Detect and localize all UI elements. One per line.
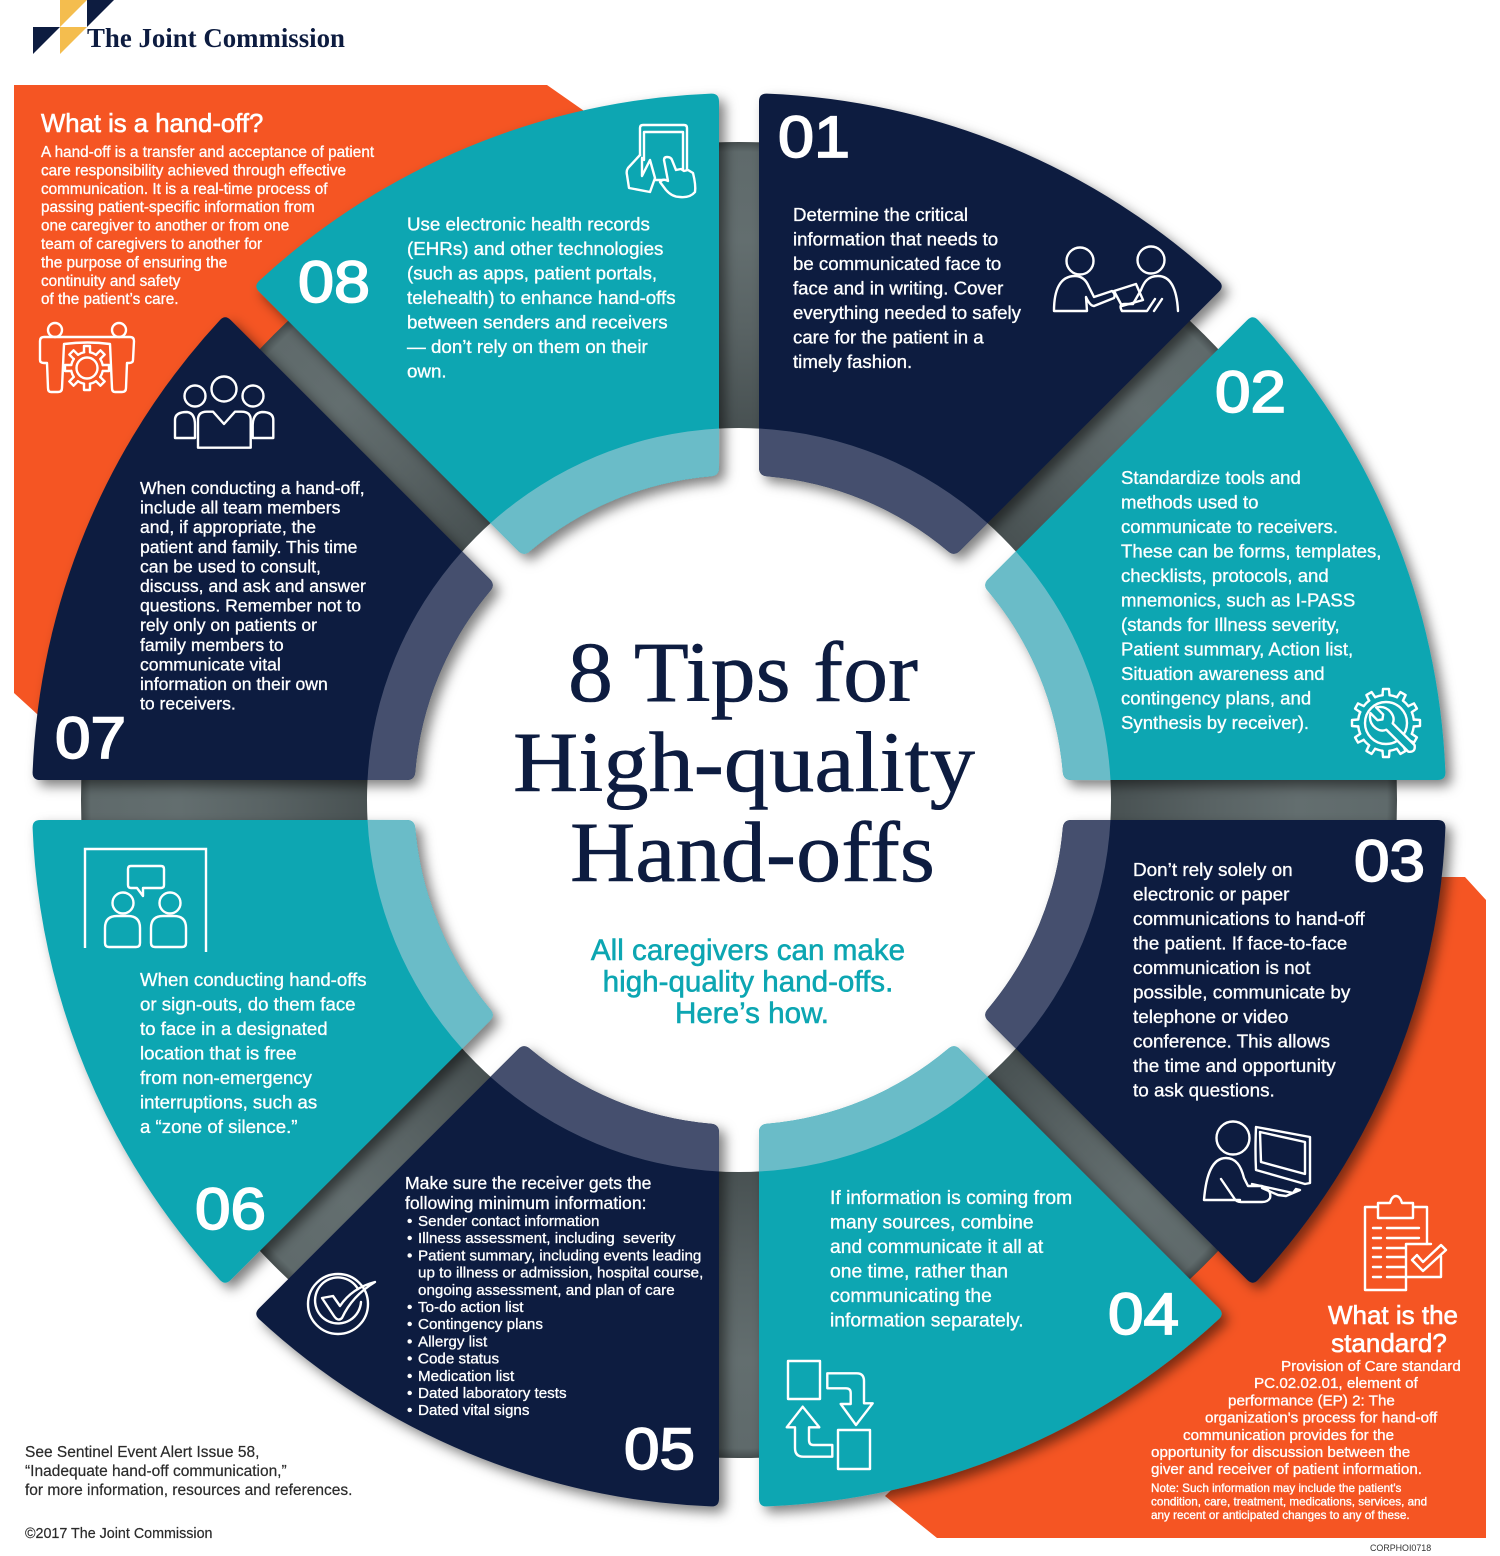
list tip 05: Illness assessment, including severity — [418, 1230, 676, 1247]
list tip 05: Sender contact information — [418, 1213, 600, 1230]
list tip 05: • — [407, 1351, 412, 1368]
text tip 02: methods used to — [1121, 492, 1258, 512]
what is the standard heading: What is the — [1328, 1300, 1458, 1330]
icon: circled check — [308, 1274, 375, 1334]
text tip 08: between senders and receivers — [407, 312, 668, 332]
icon: clipboard with check — [1365, 1196, 1446, 1290]
text tip 04: one time, rather than — [830, 1262, 1008, 1282]
text tip 01: timely fashion. — [793, 351, 912, 372]
list tip 05: Code status — [418, 1351, 499, 1368]
what is the standard text: organization's process for hand-off — [1205, 1410, 1438, 1427]
text tip 02: (stands for Illness severity, — [1121, 614, 1340, 635]
number 02: 02 — [1215, 360, 1286, 425]
panel: tip 08 — [256, 94, 719, 554]
text tip 03: electronic or paper — [1133, 884, 1289, 906]
text tip 02: contingency plans, and — [1121, 688, 1311, 708]
text tip 07: discuss, and ask and answer — [140, 576, 366, 596]
document code: CORPHOI0718 — [1370, 1543, 1431, 1553]
panel: what is the standard background — [885, 877, 1486, 1538]
panel: tip 07 — [33, 317, 493, 780]
text tip 07: information on their own — [140, 674, 328, 694]
text tip 01: face and in writing. Cover — [793, 278, 1003, 298]
wedge 05 — [256, 1046, 719, 1506]
text tip 02: checklists, protocols, and — [1121, 565, 1329, 586]
what is a hand-off text: A hand-off is a transfer and acceptance of patient — [41, 144, 375, 161]
text tip 06: to face in a designated — [140, 1018, 328, 1039]
text tip 06: from non-emergency — [140, 1067, 313, 1088]
standard note: any recent or anticipated changes to any of these. — [1151, 1509, 1410, 1522]
text tip 03: the patient. If face-to-face — [1133, 934, 1347, 954]
what is a hand-off text: care responsibility achieved through effective — [41, 162, 346, 179]
text tip 04: communicating the — [830, 1286, 992, 1307]
title: 8 Tips for — [568, 624, 918, 720]
list tip 05: Patient summary, including events leading — [418, 1247, 701, 1264]
logo: The Joint Commission — [33, 0, 345, 54]
number 03: 03 — [1354, 829, 1425, 894]
text tip 03: Don’t rely solely on — [1133, 860, 1293, 881]
text tip 02: Patient summary, Action list, — [1121, 638, 1353, 660]
text tip 05 heading: following minimum information: — [405, 1193, 647, 1213]
what is a hand-off text: one caregiver to another or from one — [41, 218, 289, 235]
text tip 04: many sources, combine — [830, 1212, 1034, 1234]
text tip 03: communications to hand-off — [1133, 909, 1365, 930]
text tip 06: When conducting hand-offs — [140, 969, 367, 990]
list tip 05: up to illness or admission, hospital course, — [418, 1265, 703, 1282]
list tip 05: • — [407, 1247, 412, 1264]
what is the standard text: PC.02.02.01, element of — [1254, 1375, 1419, 1392]
icon: gear and wrench — [1352, 689, 1421, 758]
text tip 01: be communicated face to — [793, 253, 1001, 274]
icon: three people — [175, 376, 273, 448]
text tip 07: communicate vital — [140, 654, 281, 674]
list tip 05: Dated vital signs — [418, 1402, 530, 1419]
text tip 06: or sign-outs, do them face — [140, 994, 356, 1014]
panel: tip 02 — [985, 317, 1445, 780]
number 05: 05 — [624, 1417, 695, 1482]
text tip 07: to receivers. — [140, 694, 236, 714]
list tip 05: Medication list — [418, 1368, 515, 1385]
panel: tip 06 — [33, 820, 493, 1283]
text tip 08: telehealth) to enhance hand-offs — [407, 287, 676, 308]
text tip 03: the time and opportunity — [1133, 1056, 1336, 1077]
text tip 01: Determine the critical — [793, 204, 968, 225]
icon: hands on tablet — [627, 125, 695, 197]
title — [513, 624, 975, 900]
icon: two people talking in a room — [85, 849, 206, 952]
number 08: 08 — [298, 250, 370, 315]
text tip 06: a “zone of silence.” — [140, 1116, 298, 1137]
text tip 03: communication is not — [1133, 958, 1311, 979]
what is a hand-off text: of the patient’s care. — [41, 291, 178, 308]
wedge 06 — [33, 820, 493, 1283]
connecting ring — [224, 285, 1254, 1315]
list tip 05: • — [407, 1385, 412, 1402]
text tip 08: — don’t rely on them on their — [407, 336, 648, 357]
text tip 07: When conducting a hand-off, — [140, 478, 365, 498]
text tip 02: These can be forms, templates, — [1121, 540, 1381, 562]
what is the standard text: opportunity for discussion between the — [1151, 1444, 1410, 1461]
standard note: Note: Such information may include the patient's — [1151, 1482, 1402, 1495]
list tip 05: • — [407, 1402, 412, 1419]
text tip 06: interruptions, such as — [140, 1092, 317, 1112]
text tip 07: and, if appropriate, the — [140, 517, 316, 537]
title: Hand-offs — [570, 804, 935, 900]
text tip 08: Use electronic health records — [407, 214, 650, 234]
text tip 04: If information is coming from — [830, 1188, 1072, 1209]
list tip 05: • — [407, 1299, 412, 1316]
text tip 02: mnemonics, such as I-PASS — [1121, 590, 1355, 610]
subtitle: Here’s how. — [675, 997, 829, 1030]
text tip 02: Synthesis by receiver). — [1121, 712, 1309, 733]
text tip 07: patient and family. This time — [140, 537, 357, 557]
text tip 01: everything needed to safely — [793, 302, 1022, 323]
what is a hand-off text: passing patient-specific information from — [41, 199, 315, 216]
what is the standard text: performance (EP) 2: The — [1228, 1392, 1395, 1409]
what is a hand-off text: communication. It is a real-time process of — [41, 181, 328, 198]
what is the standard text: giver and receiver of patient information. — [1151, 1461, 1422, 1478]
text tip 03: to ask questions. — [1133, 1080, 1275, 1102]
what is a hand-off text: team of caregivers to another for — [41, 236, 262, 253]
subtitle: high-quality hand-offs. — [603, 966, 893, 999]
text tip 02: communicate to receivers. — [1121, 516, 1338, 537]
list tip 05: Contingency plans — [418, 1316, 543, 1333]
list tip 05: • — [407, 1213, 412, 1230]
text tip 07: questions. Remember not to — [140, 596, 361, 616]
reference note: for more information, resources and references. — [25, 1482, 352, 1499]
number 06: 06 — [195, 1177, 266, 1242]
what is a hand-off heading: What is a hand-off? — [41, 110, 263, 138]
text tip 08: (EHRs) and other technologies — [407, 238, 663, 259]
standard note: condition, care, treatment, medications, services, and — [1151, 1496, 1427, 1509]
wedge 02 — [985, 317, 1445, 780]
text tip 01: information that needs to — [793, 228, 998, 250]
text tip 07: rely only on patients or — [140, 615, 317, 635]
subtitle: All caregivers can make — [591, 934, 905, 967]
icon: person at computer — [1204, 1122, 1310, 1202]
list tip 05: Allergy list — [418, 1333, 488, 1350]
icon: two people holding gear — [40, 323, 134, 392]
text tip 07: include all team members — [140, 498, 341, 518]
number 04: 04 — [1108, 1282, 1179, 1347]
text tip 02: Standardize tools and — [1121, 467, 1301, 488]
what is a hand-off text: continuity and safety — [41, 273, 181, 290]
logo: The Joint Commission: The Joint Commission — [87, 23, 345, 53]
what is the standard text: communication provides for the — [1183, 1427, 1394, 1444]
list tip 05: • — [407, 1368, 412, 1385]
wedge 07 — [33, 317, 493, 780]
what is the standard heading: standard? — [1331, 1328, 1447, 1358]
text tip 07: family members to — [140, 635, 284, 655]
list tip 05: To-do action list — [418, 1299, 524, 1316]
panel: tip 01 — [759, 94, 1222, 554]
panel: tip 04 — [759, 1046, 1222, 1506]
panel: tip 05 — [256, 1046, 719, 1506]
text tip 06: location that is free — [140, 1042, 296, 1064]
text tip 04: information separately. — [830, 1310, 1024, 1332]
title: High-quality — [513, 714, 975, 810]
list tip 05: • — [407, 1316, 412, 1333]
panel: tip 03 — [985, 820, 1445, 1283]
list tip 05: Dated laboratory tests — [418, 1385, 567, 1402]
text tip 05 heading: Make sure the receiver gets the — [405, 1173, 651, 1193]
list tip 05: • — [407, 1333, 412, 1350]
text tip 03: possible, communicate by — [1133, 982, 1351, 1004]
copyright: ©2017 The Joint Commission — [25, 1526, 213, 1542]
text tip 03: telephone or video — [1133, 1007, 1288, 1028]
text tip 07: can be used to consult, — [140, 556, 321, 576]
list tip 05: • — [407, 1230, 412, 1247]
icon: two people with tablet — [1054, 246, 1178, 311]
text tip 03: conference. This allows — [1133, 1032, 1330, 1052]
text tip 02: Situation awareness and — [1121, 663, 1325, 684]
number 07: 07 — [55, 706, 126, 771]
wedge 03 — [985, 820, 1445, 1283]
text tip 08: own. — [407, 360, 447, 382]
number 01: 01 — [778, 105, 850, 170]
text tip 08: (such as apps, patient portals, — [407, 262, 657, 284]
wedge 08 — [256, 94, 719, 554]
text tip 04: and communicate it all at — [830, 1237, 1044, 1258]
panel: what is a hand-off background — [14, 85, 640, 735]
icon: exchange arrows and squares — [787, 1361, 873, 1469]
wedge 04 — [759, 1046, 1222, 1506]
list tip 05: ongoing assessment, and plan of care — [418, 1282, 675, 1299]
reference note: See Sentinel Event Alert Issue 58, — [25, 1444, 259, 1461]
what is a hand-off text: the purpose of ensuring the — [41, 254, 227, 271]
text tip 01: care for the patient in a — [793, 326, 984, 348]
wedge 01 — [759, 94, 1222, 554]
reference note: “Inadequate hand-off communication,” — [25, 1463, 287, 1480]
what is the standard text: Provision of Care standard — [1281, 1358, 1461, 1375]
